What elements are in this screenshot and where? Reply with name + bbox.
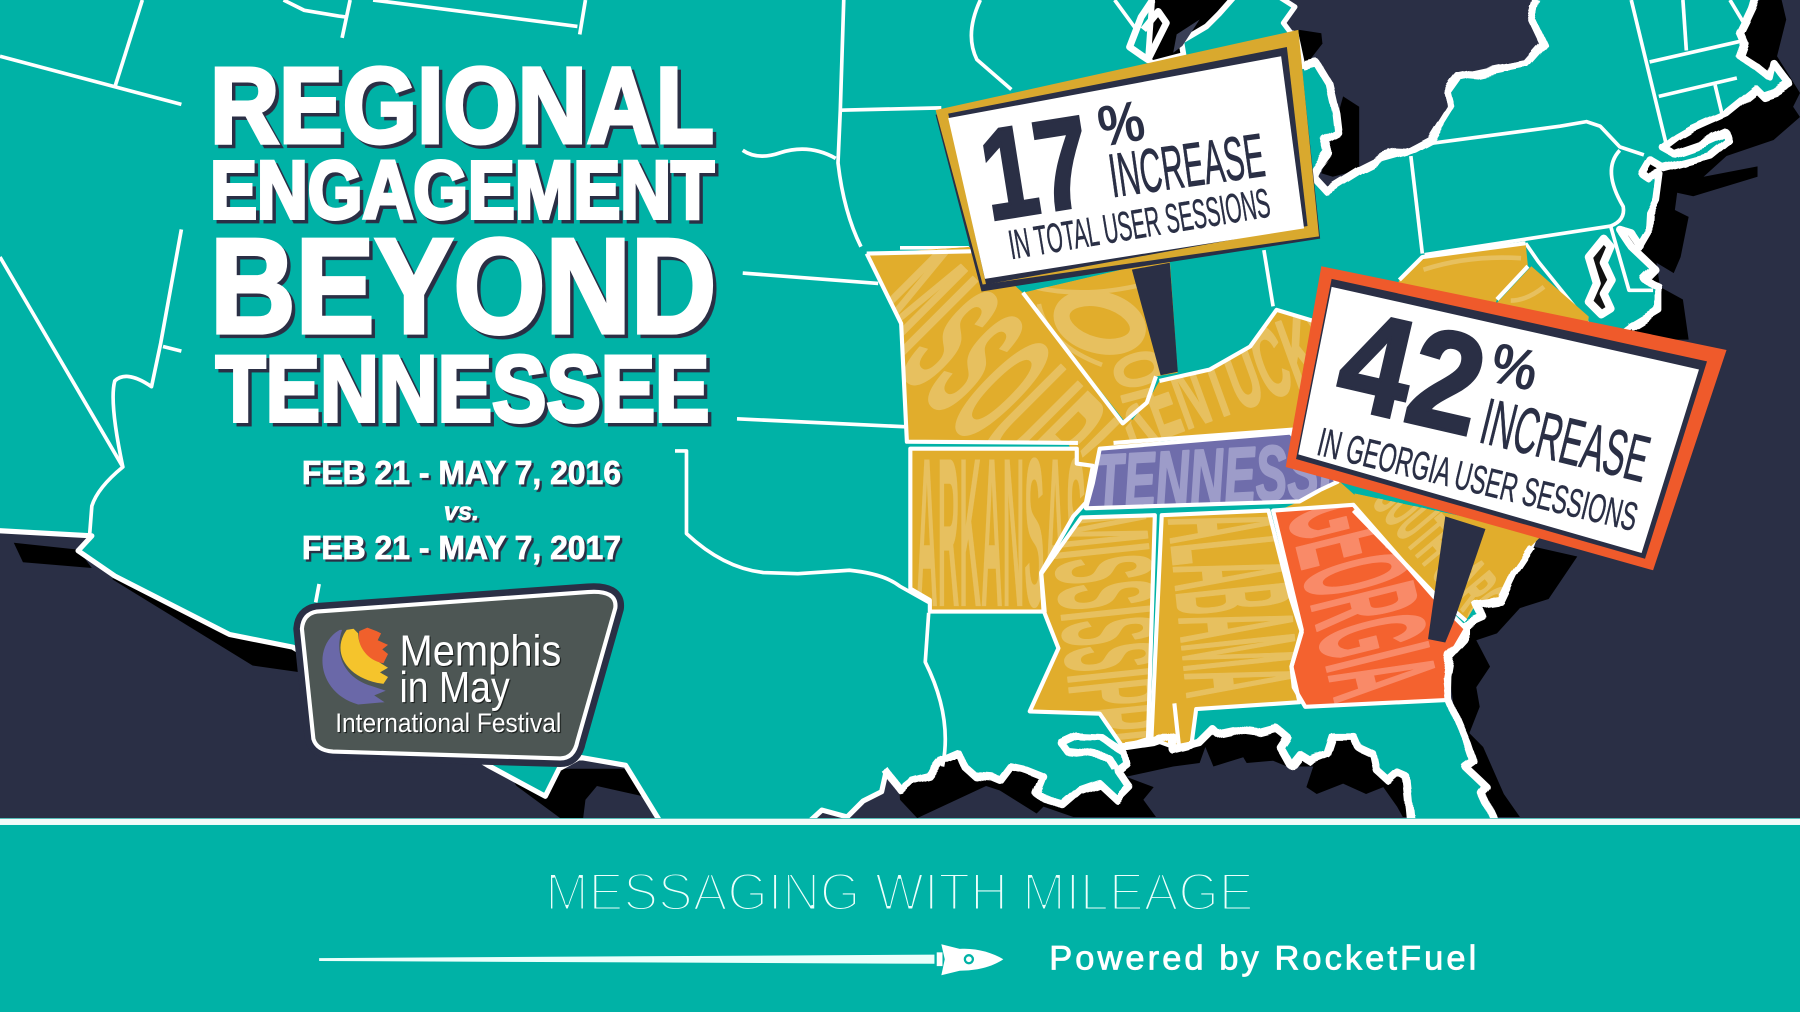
logo wordmark: in May [399,664,510,712]
state outlines [867,243,1528,747]
date comparison: vs. [444,498,479,526]
state: tennessee [1088,434,1334,506]
title: REGIONAL [210,44,714,165]
state: illinois [1025,262,1178,422]
pole: 17 percent sign [1132,263,1178,375]
date comparison [302,455,621,567]
state: missouri [870,246,1120,458]
text: SOUTH CAROLINA [1360,465,1557,679]
pole: 42 percent sign [1428,516,1485,643]
arrow: rocket trail and rocket [319,944,1003,975]
lake michigan [1130,0,1236,63]
state: tennessee: TENNESSEE [1093,423,1385,526]
text: MISSOURI [829,217,1147,536]
text: KENTUCKY [1100,285,1359,470]
state: mississippi [1032,517,1153,744]
icon: feather logo [322,628,388,704]
callout: 42 percent increase [1286,266,1727,570]
percent: % [1093,89,1150,160]
big number: 17 [972,90,1101,248]
logo wordmark [335,627,561,738]
powered by label: Powered by RocketFuel [1049,940,1476,978]
state: south carolina [1354,494,1540,620]
logo wordmark: International Festival [335,708,561,738]
big number: 42 [1325,280,1499,465]
title [210,44,716,441]
date comparison: FEB 21 - MAY 7, 2017 [302,530,621,567]
logo badge [302,592,615,758]
date comparison: FEB 21 - MAY 7, 2016 [302,455,621,492]
subtitle: IN TOTAL USER SESSIONS [1005,180,1273,268]
callout: 17 percent increase [936,30,1320,291]
title: BEYOND [210,210,716,362]
state borders [0,0,1744,766]
footer band [0,818,1800,1012]
title: ENGAGEMENT [210,145,714,236]
chesapeake bay [1589,239,1612,314]
state: georgia [1276,507,1464,705]
state: alabama [1154,512,1300,744]
state: virginia and north carolina [1378,243,1589,356]
logo wordmark: Memphis [399,627,561,675]
increase label: INCREASE [1105,121,1269,211]
gold underlay joining the southern states [1068,419,1368,513]
percent: % [1485,331,1544,404]
state: arkansas [912,450,1090,610]
state: illinois: OIS [1097,342,1192,439]
state: kentucky [1126,312,1312,440]
tagline: MESSAGING WITH MILEAGE [545,863,1254,922]
title: TENNESSEE [216,336,709,441]
wiggly coast outline [886,0,1790,822]
